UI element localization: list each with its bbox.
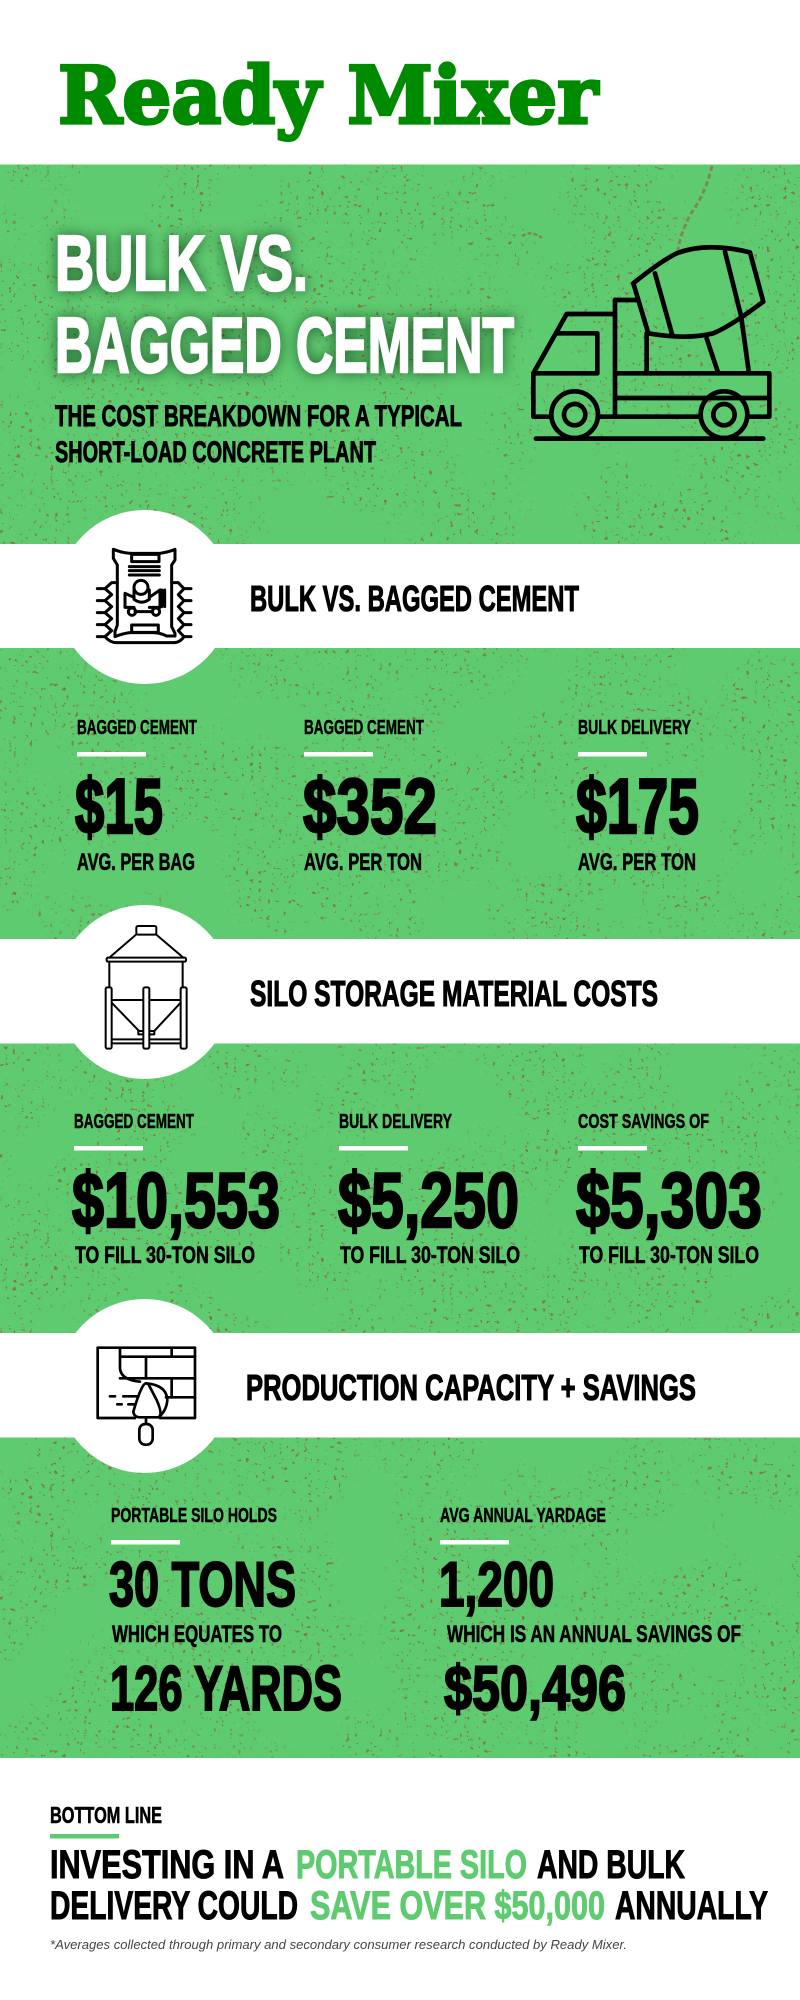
stat: equates to yards — [110, 1621, 342, 1724]
logo: Ready Mixer: Ready Mixer — [58, 49, 599, 142]
footnote: *Averages collected through primary and secondary consumer research conducted by Ready Mixer. — [50, 1938, 627, 1952]
stat: annual yardage: 1,200 — [439, 1550, 554, 1620]
bottom line statement: INVESTING IN A — [50, 1843, 284, 1887]
stat: bagged cement per bag: AVG. PER BAG — [77, 849, 195, 876]
stat: bulk delivery to fill silo: BULK DELIVERY — [339, 1111, 452, 1133]
bottom line statement: DELIVERY COULD — [50, 1884, 298, 1928]
stat: annual yardage — [439, 1505, 606, 1620]
stat: bulk delivery to fill silo: TO FILL 30-TON SILO — [340, 1242, 520, 1269]
hero title: BAGGED CEMENT — [55, 301, 514, 389]
stat: bulk delivery to fill silo: $5,250 — [338, 1156, 519, 1244]
stat: bulk delivery to fill silo — [338, 1111, 520, 1269]
hero title — [55, 219, 514, 389]
stat: bagged cement per ton: $352 — [303, 762, 437, 850]
icon: cement bag — [97, 549, 191, 643]
stat: equates to yards: 126 YARDS — [110, 1654, 342, 1724]
icon: trowel and bricks — [98, 1348, 195, 1445]
bottom line statement: PORTABLE SILO — [296, 1843, 527, 1887]
hero subtitle — [55, 400, 462, 469]
hero subtitle: THE COST BREAKDOWN FOR A TYPICAL — [55, 400, 462, 433]
stat: portable silo holds — [109, 1505, 296, 1620]
bottom line statement: AND BULK — [537, 1843, 685, 1887]
stat: bagged cement to fill silo: $10,553 — [72, 1156, 280, 1244]
stat: annual yardage: AVG ANNUAL YARDAGE — [440, 1505, 606, 1527]
stat: bulk delivery per ton: AVG. PER TON — [578, 849, 696, 876]
stat: portable silo holds: 30 TONS — [109, 1550, 296, 1620]
stat: cost savings: COST SAVINGS OF — [578, 1111, 709, 1133]
section band 1 — [0, 510, 800, 684]
textured green background panel — [0, 164, 800, 1758]
icon: silo — [106, 926, 187, 1049]
stat: bulk delivery per ton: BULK DELIVERY — [578, 717, 691, 739]
stat: bulk delivery per ton: $175 — [576, 762, 699, 850]
stat: bagged cement per ton: AVG. PER TON — [304, 849, 422, 876]
stat: bagged cement to fill silo: TO FILL 30-TON SILO — [75, 1242, 255, 1269]
bottom line statement — [50, 1843, 768, 1928]
stat: bagged cement per bag — [75, 717, 197, 876]
stat: bagged cement per bag: $15 — [75, 762, 163, 850]
stat: bagged cement to fill silo — [72, 1111, 280, 1269]
hero title: BULK VS. — [55, 219, 308, 307]
stat: annual savings: $50,496 — [444, 1654, 626, 1724]
bottom line label: BOTTOM LINE — [50, 1802, 162, 1828]
stat: bagged cement per ton: BAGGED CEMENT — [304, 717, 424, 739]
stat: bagged cement per bag: BAGGED CEMENT — [77, 717, 197, 739]
hero subtitle: SHORT-LOAD CONCRETE PLANT — [55, 436, 376, 469]
stat: bagged cement to fill silo: BAGGED CEMENT — [74, 1111, 194, 1133]
icon: cement mixer truck — [533, 247, 769, 439]
stat: annual savings — [444, 1621, 741, 1724]
section band 3 — [0, 1299, 800, 1473]
stat: cost savings — [576, 1111, 762, 1269]
stat: portable silo holds: PORTABLE SILO HOLDS — [111, 1505, 277, 1527]
stat: equates to yards: WHICH EQUATES TO — [112, 1621, 282, 1648]
bottom line statement: SAVE OVER $50,000 — [310, 1884, 605, 1928]
section band 2 — [0, 905, 800, 1079]
stat: bulk delivery per ton — [576, 717, 699, 876]
stat: bagged cement per ton — [303, 717, 437, 876]
bottom line label — [50, 1802, 162, 1838]
heading: BULK VS. BAGGED CEMENT — [250, 578, 579, 619]
